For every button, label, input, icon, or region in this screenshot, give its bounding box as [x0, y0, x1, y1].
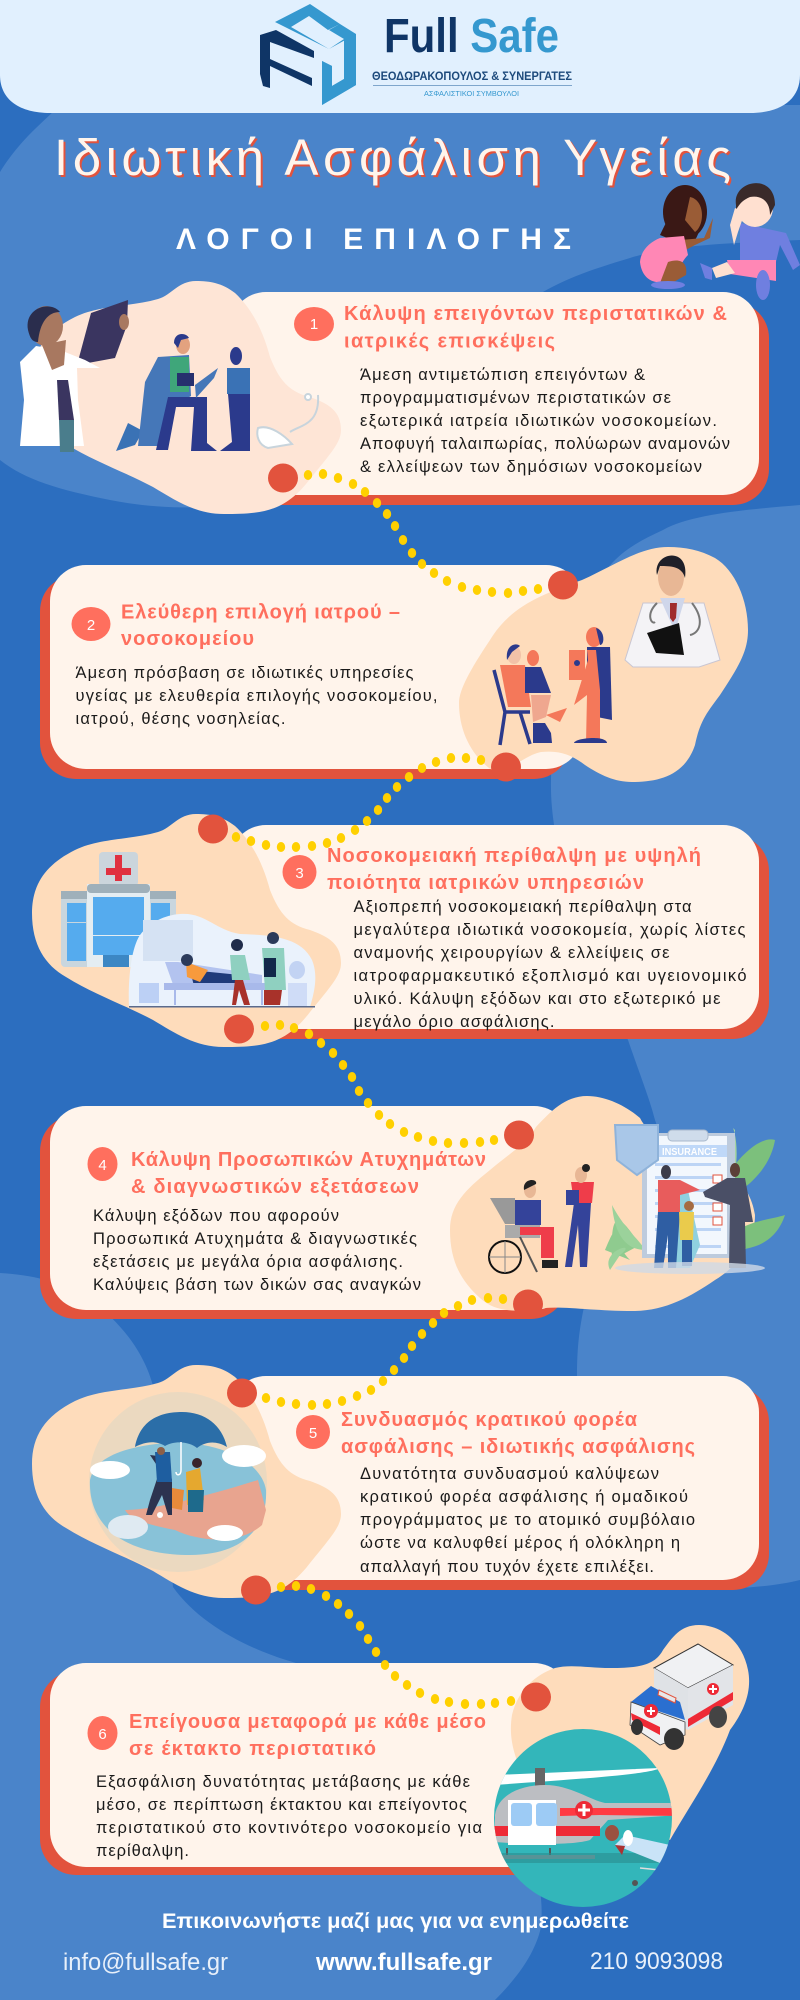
icon: number badge 3: [282, 855, 316, 889]
logo: [260, 4, 572, 105]
icon: number badge 5: [296, 1415, 330, 1449]
icon: wheelchair user and carer: [489, 1164, 594, 1273]
panel 3: [32, 814, 769, 1047]
icon: hospital building: [61, 852, 176, 967]
text 1: Άμεση αντιμετώπιση επειγόντων &: [360, 366, 645, 384]
icon: number badge 4: 4: [98, 1157, 107, 1174]
icon: number badge 6: 6: [98, 1726, 107, 1743]
icon: number badge 1: 1: [310, 316, 318, 333]
text 1: & ελλείψεων των δημόσιων νοσοκομείων: [360, 458, 702, 476]
icon: stethoscope: [257, 394, 318, 448]
text 6: μέσο, σε περίπτωση έκτακτου και επείγοντος: [96, 1796, 467, 1814]
icon: number badge 1: [294, 307, 334, 341]
heading 4: [131, 1149, 486, 1198]
panel 1: [20, 281, 769, 514]
heading 1: [344, 303, 727, 352]
connector dots: [232, 469, 542, 1709]
title: Ιδιωτική Ασφάλιση Υγείας: [54, 129, 731, 186]
panel 4: [40, 1096, 785, 1319]
text 3: ιατροφαρμακευτικό εξοπλισμό και υγειονομικό: [354, 967, 746, 985]
logo subtitle: ΑΣΦΑΛΙΣΤΙΚΟΙ ΣΥΜΒΟΥΛΟΙ: [424, 89, 519, 98]
logo tagline: ΘΕΟΔΩΡΑΚΟΠΟΥΛΟΣ & ΣΥΝΕΡΓΑΤΕΣ: [372, 71, 572, 83]
text 5: [360, 1465, 695, 1576]
website: www.fullsafe.gr: [315, 1949, 492, 1976]
icon: helicopter scene: [490, 1729, 680, 1907]
icon: number badge 6: [88, 1716, 118, 1750]
footer heading: Επικοινωνήστε μαζί μας για να ενημερωθείτε: [162, 1910, 629, 1933]
text 6: [96, 1773, 482, 1860]
heading 1: Κάλυψη επειγόντων περιστατικών &: [344, 303, 727, 325]
text 3: Αξιοπρεπή νοσοκομειακή περίθαλψη στα: [354, 898, 692, 916]
heading 4: & διαγνωστικών εξετάσεων: [131, 1176, 419, 1198]
logo wordmark: Full Safe: [384, 10, 559, 63]
text 5: απαλλαγή που τυχόν έχετε επιλέξει.: [360, 1558, 654, 1576]
text 3: μεγάλο όριο ασφάλισης.: [354, 1013, 554, 1031]
text 3: μεγαλύτερα ιδιωτικά νοσοκομεία, χωρίς λίστες: [354, 921, 746, 939]
text 3: αναμονής χειρουργίων & ελλείψεις σε: [354, 944, 670, 962]
panel 5: [32, 1365, 769, 1598]
heading 2: νοσοκομείου: [121, 628, 254, 650]
connector nodes: [198, 464, 578, 1712]
text 3: υλικό. Κάλυψη εξόδων και στο εξωτερικό με: [354, 990, 721, 1008]
heading 6: σε έκτακτο περιστατικό: [129, 1738, 376, 1760]
icon: family under umbrella on hand: [89, 1392, 267, 1572]
icon: number badge 2: 2: [87, 617, 95, 634]
text 4: [93, 1207, 421, 1294]
heading 3: Νοσοκομειακή περίθαλψη με υψηλή: [327, 845, 701, 867]
icon: number badge 3: 3: [295, 865, 304, 882]
heading 4: Κάλυψη Προσωπικών Ατυχημάτων: [131, 1149, 486, 1171]
panel 2: [40, 547, 748, 782]
text 3: [354, 898, 746, 1031]
heading 5: [341, 1409, 695, 1458]
heading 6: [129, 1711, 486, 1760]
heading 1: ιατρικές επισκέψεις: [344, 330, 555, 352]
heading 3: ποιότητα ιατρικών υπηρεσιών: [327, 872, 644, 894]
text 5: προγράμματος με το ατομικό συμβόλαιο: [360, 1511, 695, 1529]
heading 5: ασφάλισης – ιδιωτικής ασφάλισης: [341, 1436, 695, 1458]
text 6: περιστατικού στο κοντινότερο νοσοκομείο για: [96, 1819, 482, 1837]
icon: number badge 2: [72, 607, 110, 641]
footer contact: [63, 1910, 723, 1976]
icon: insurance document and family: INSURANCE: [662, 1146, 717, 1158]
text 4: Προσωπικά Ατυχημάτα & διαγνωστικές: [93, 1230, 417, 1248]
icon: kneeling doctor and child: [116, 334, 250, 451]
text 2: [76, 664, 438, 728]
heading 6: Επείγουσα μεταφορά με κάθε μέσο: [129, 1711, 486, 1733]
subtitle: ΛΟΓΟΙ ΕΠΙΛΟΓΗΣ: [176, 223, 571, 256]
text 4: Κάλυψη εξόδων που αφορούν: [93, 1207, 339, 1225]
heading 2: [121, 602, 400, 650]
text 1: [360, 366, 730, 476]
icon: doctor with clipboard: [625, 555, 720, 667]
phone: 210 9093098: [590, 1948, 723, 1975]
text 2: υγείας με ελευθερία επιλογής νοσοκομείου,: [76, 687, 438, 705]
text 5: κρατικού φορέα ασφάλισης ή ομαδικού: [360, 1488, 688, 1506]
text 2: Άμεση πρόσβαση σε ιδιωτικές υπηρεσίες: [76, 664, 414, 682]
icon: number badge 4: [88, 1147, 118, 1181]
text 5: Δυνατότητα συνδυασμού καλύψεων: [360, 1465, 659, 1483]
icon: patient room scene: [129, 914, 315, 1008]
header band: [0, 0, 800, 113]
text 2: ιατρού, θέσης νοσηλείας.: [76, 710, 286, 728]
icon: insurance document and family: [605, 1125, 785, 1274]
text 1: εξωτερικά ιατρεία ιδιωτικών νοσοκομείων.: [360, 412, 717, 430]
heading 3: [327, 845, 701, 894]
icon: children: [640, 183, 800, 300]
text 5: ώστε να καλυφθεί μέρος ή ολόκληρη η: [360, 1534, 680, 1552]
heading 2: Ελεύθερη επιλογή ιατρού –: [121, 602, 400, 624]
icon: number badge 5: 5: [309, 1425, 317, 1442]
icon: doctor with x-ray: [20, 300, 129, 452]
icon: patients and nurse: [494, 627, 612, 745]
text 4: Καλύψεις βάση των δικών σας αναγκών: [93, 1276, 421, 1294]
email: info@fullsafe.gr: [63, 1949, 228, 1976]
icon: ambulance: [630, 1644, 733, 1750]
text 1: προγραμματισμένων περιστατικών σε: [360, 389, 672, 407]
text 6: Εξασφάλιση δυνατότητας μετάβασης με κάθε: [96, 1773, 471, 1791]
heading 5: Συνδυασμός κρατικού φορέα: [341, 1409, 638, 1431]
text 4: εξετάσεις με μεγάλα όρια ασφάλισης.: [93, 1253, 403, 1271]
logo mark: [260, 4, 356, 105]
text 1: Αποφυγή ταλαιπωρίας, πολύωρων αναμονών: [360, 435, 730, 453]
panel 6: [40, 1625, 749, 1907]
text 6: περίθαλψη.: [96, 1842, 189, 1860]
